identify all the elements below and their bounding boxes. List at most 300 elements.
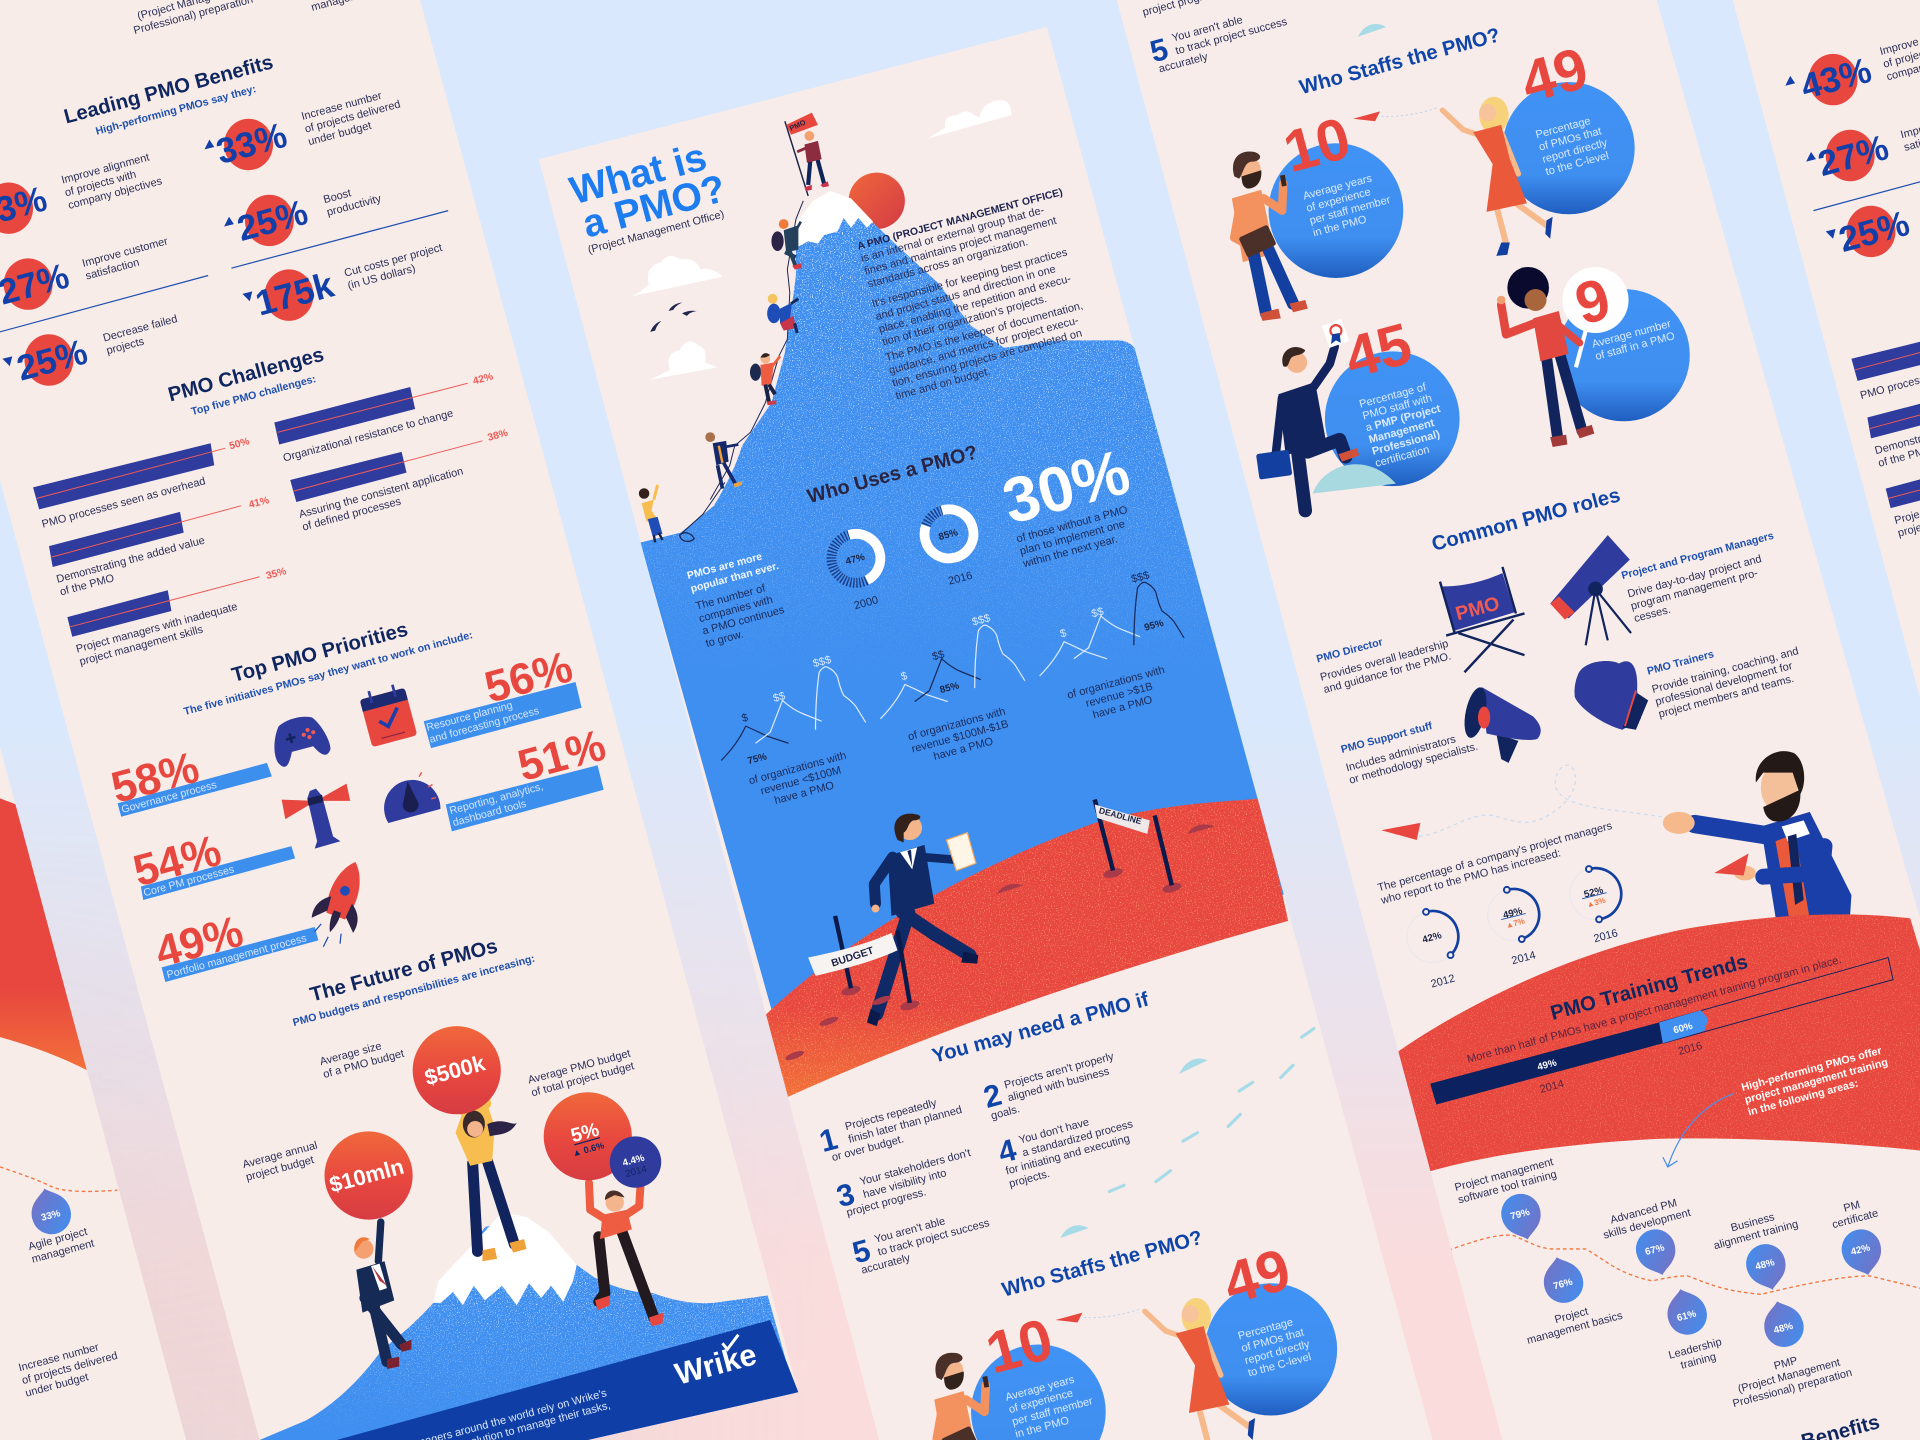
ball: 10mln with man [324,1131,413,1369]
benefit: 175k: 175k [251,265,338,324]
priority: portfolio: Portfolio management process [165,932,308,981]
drop: 61 [1661,1284,1726,1374]
stat: 10 years [1232,106,1403,321]
chart labels: small: $ [740,712,749,725]
priority: resource planning: and forecasting process [428,705,540,746]
item 4: for initiating and executing [1004,1133,1131,1178]
cloud [632,256,722,296]
priority: governance: 58% [106,743,204,813]
drop: 67: Advanced PM [1609,1197,1678,1226]
drop: 79: software tool training [1457,1169,1558,1206]
heading: challenges: PMO Challenges [166,344,326,406]
heading: who staffs: Who Staffs the PMO? [1000,1227,1205,1302]
heading: roles: Common PMO roles [1429,484,1623,556]
drop: 61: training [1679,1351,1717,1372]
dashed route [0,1167,118,1191]
subheading: High-performing PMOs say they: [94,83,257,138]
drop: agile [32,1188,71,1234]
priority: reporting [446,731,606,832]
drop: 42: certificate [1831,1207,1880,1231]
chart labels: mid: $$ [931,648,946,663]
icon: gamepad [274,716,330,767]
heading: who staffs: Who Staffs the PMO? [1297,24,1502,99]
text: PMO trainers: Provide training, coaching, and [1651,645,1800,696]
chart labels: small: revenue <$100M [759,764,843,797]
text: what is a PMO definition: tion of their organization's projects. [881,293,1048,349]
ring: 2014: ▲7% [1505,916,1526,930]
heading: priorities: Top PMO Priorities [229,619,410,687]
benefit: 175k: (in US dollars) [346,263,417,292]
lower staff stats repeat: per staff member [1011,1395,1094,1428]
lower staff stats repeat: report directly [1243,1338,1311,1367]
deadline posts behind hill top [1095,800,1172,885]
chart labels: large: of organizations with [1066,664,1166,702]
text: what is a PMO definition: time and on budget. [894,366,992,402]
bar: consistency 38%: 38% [487,428,509,444]
benefit: 25% boost [224,189,380,246]
benefit: 33%: of projects delivered [304,98,402,136]
panel: left strip [0,0,845,1440]
dome markers [1060,1059,1207,1238]
benefit: 33%: 33% [212,115,291,172]
drop: 48 PMP: PMP [1773,1355,1799,1373]
item 5 repeat [1146,3,1292,75]
divider right [231,211,448,268]
priority: resource planning: Resource planning [425,699,514,734]
text: what is a PMO definition [856,187,1095,402]
ring: 2016: 2016 [1592,927,1619,945]
title: a PMO? [578,167,730,247]
bar: consistency 38% [290,428,509,534]
priority: portfolio [158,917,318,982]
text: project and program managers [1620,530,1775,625]
ring: 2016 [1564,862,1627,945]
item 5: 5 [849,1233,874,1270]
drop: 76: management basics [1526,1310,1624,1347]
text: PMO trainers: PMO Trainers [1646,648,1715,678]
stat: 49 percent: of PMOs that [1538,125,1603,154]
stat: 45 percent: Professional) [1371,428,1442,458]
stat: 45 percent: 45 [1338,311,1418,391]
benefit: 43% [0,150,164,235]
icon: rocket [312,862,360,947]
ball: 5% with climber: 4.4% [621,1153,646,1169]
benefit: 25% boost: 25% [233,192,312,249]
dome marker [1358,24,1386,37]
item 2: Projects aren't properly [1003,1051,1116,1091]
chart labels: large: revenue >$1B [1084,681,1154,710]
deadline posts front [1095,800,1182,894]
stat: 9 staff: 9 [1569,266,1617,338]
bar: skills 35% [67,566,288,668]
benefit: 25% failed [2,313,182,389]
stat: 10 years: in the PMO [1312,213,1368,239]
chart labels: large [1059,569,1173,726]
donut: 2000: 2000 [853,594,880,612]
bar: added value 41%: Demonstrating the added value [55,535,206,586]
drop: 48 business [1709,1206,1800,1295]
text: more popular [686,547,790,650]
item 1: or over budget. [831,1133,905,1164]
item 1: 1 [816,1122,841,1159]
stat: 9 staff [1497,266,1690,447]
drop: 42 [1828,1195,1887,1280]
plane trail [1381,108,1438,116]
lower staff stats repeat: 49 [1217,1237,1297,1317]
arrow [1663,1093,1734,1167]
mountain with snow [260,1212,808,1440]
climber two [771,219,802,269]
item 5: You aren't able [873,1215,947,1246]
item 4: 4 [995,1133,1020,1170]
chart labels: mid: have a PMO [932,735,995,763]
text: average annual: Average annual [241,1140,319,1171]
drop: 76 [1522,1252,1624,1347]
progress bar: 2014 [1538,1078,1565,1096]
text: what is a PMO definition: It's responsible for keeping best practices [871,246,1069,310]
chart labels: small: of organizations with [748,750,848,787]
bar: added value 41% [49,495,270,598]
chart labels: mid: revenue $100M-$1B [910,718,1010,756]
budget finish [808,916,920,1012]
challenge bar [1886,448,1920,540]
benefit: 27%: Improve customer [81,235,170,270]
stat: 30 percent: 30% [995,436,1137,538]
plane trail with loop [1419,765,1662,836]
item 5: accurately [860,1252,912,1277]
priority: governance: Governance process [120,779,218,816]
stat: 45 percent [1256,311,1460,511]
lower staff stats repeat: Percentage [1237,1316,1294,1342]
text: project and program managers: Drive day-to-day project and [1626,553,1763,600]
text: what is a PMO definition: place, enabling the repetition and execu- [878,273,1073,336]
text: more popular: popular than ever. [689,560,780,595]
benefit: 25% failed: projects [105,335,146,357]
drop: 76: Project [1553,1306,1590,1326]
rope [680,201,803,535]
stat: 9 staff: Average number [1591,318,1673,351]
stat: 10 years: per staff member [1308,194,1392,227]
sun [849,173,905,229]
climber four [750,353,780,405]
drop: 42: PM [1842,1199,1861,1215]
text: project and program managers: program management pro- [1630,567,1760,613]
priority: resource planning [424,642,582,748]
stat: 49 percent: to the C-level [1544,150,1610,178]
text: project and program managers: Project and Program Managers [1620,530,1775,582]
item 4: You don't have [1018,1116,1090,1147]
benefit: 27%: satisfaction [84,257,141,282]
drop: 48 PMP: Professional) preparation [1731,1367,1853,1410]
bar: resistance 42%: Organizational resistance to change [282,407,455,465]
climber five [705,432,742,489]
text: average size: of a PMO budget [322,1048,405,1081]
icon: gauge [384,772,440,823]
subheading: future: PMO budgets and responsibilities are increasing: [292,953,536,1029]
chart: small revenue peaks [721,667,866,760]
chart labels: large: have a PMO [1091,694,1154,721]
text: agile project management: Agile project [27,1226,89,1253]
bar: skills 35%: Project managers with inadequate [75,601,239,656]
benefit: 25% failed: Decrease failed [102,313,179,345]
woman with binoculars [639,485,662,542]
priority: portfolio: 49% [150,907,248,977]
ring: 2014 [1482,883,1545,967]
chart labels: small: 75% [746,751,768,767]
bar: skills 35%: 35% [265,566,288,582]
text: more popular: PMOs are more [686,550,764,582]
text: average annual: project budget [245,1154,315,1184]
ball: 500k with woman [413,1026,527,1261]
item 4: a standardized process [1021,1118,1135,1159]
text: reports to PMO: who report to the PMO has increased: [1379,847,1562,907]
stat: 45 percent: certification [1374,444,1431,470]
chart labels: large: $$ [1090,606,1105,620]
bar: overhead 50% [33,436,251,531]
bar: added value 41%: 41% [248,495,270,511]
flag [785,113,818,196]
drop: 79: Project management [1453,1156,1555,1194]
heading: you may need: You may need a PMO if [930,989,1151,1068]
stat: 9 staff: of staff in a PMO [1594,330,1677,363]
text: PMO director: and guidance for the PMO. [1322,650,1452,696]
text: what is a PMO definition: A PMO (PROJECT MANAGEMENT OFFICE) [856,187,1064,253]
light blue footprints [1109,1029,1314,1191]
text: what is a PMO definition: is an internal or external group that de- [860,204,1046,265]
lower staff stats repeat: of PMOs that [1240,1327,1305,1355]
panel: right strip [1102,0,1920,1440]
deadline posts front: DEADLINE [1098,805,1143,826]
benefit: 25% failed: 25% [13,332,92,389]
text: reports to PMO: The percentage of a company's project managers [1376,820,1614,894]
text: increase number: under budget [24,1371,90,1400]
progress bar: 60% [1672,1021,1694,1036]
chart labels: mid: $$$ [971,612,992,629]
benefit: 27% [0,238,167,310]
priority: governance [112,753,272,817]
donut: 2000: 47% [844,552,866,567]
ball: 500k with woman: $500k [422,1050,488,1090]
ball: 5% with climber: ▲ 0.6% [571,1140,605,1158]
stat: 45 percent: Percentage of [1358,381,1428,411]
heading: future: The Future of PMOs [308,935,500,1006]
item 3: 3 [833,1177,858,1214]
budget finish: BUDGET [830,945,876,970]
ring: 2014: 2014 [1510,949,1537,967]
text: high performing: in the following areas: [1747,1078,1860,1119]
icon: calendar [358,682,417,747]
chart labels: small: $$$ [812,654,833,670]
item 4: projects. [1008,1168,1051,1190]
text: PMO trainers: professional development for [1654,660,1794,708]
runner [867,814,978,1026]
text: average size: Average size [318,1040,383,1068]
item 5 repeat: to track project success [1174,16,1289,57]
text: average budget: of total project budget [530,1060,635,1099]
subheading: challenges: Top five PMO challenges: [190,373,317,418]
item 5 repeat: You aren't able [1171,14,1244,45]
ball: 5% with climber: 5% [568,1119,601,1147]
text: increase number: of projects delivered [21,1350,119,1387]
drop: 48 business: Business [1730,1211,1776,1234]
item 3: Your stakeholders don't [858,1147,972,1188]
drop: 48 PMP [1725,1296,1853,1410]
text: project and program managers: cesses. [1633,604,1672,625]
item 3 [833,1147,979,1219]
ring: 2014: 49% [1502,906,1524,921]
bar: consistency 38%: of defined processes [301,495,403,534]
text: PMO director: PMO Director [1315,636,1384,665]
donut: 2016 [919,504,979,588]
drop: 61: 61% [1676,1308,1698,1324]
climber three [767,294,798,333]
benefit: 43%: of projects with [64,169,138,199]
paper plane [1353,111,1380,121]
subheading: priorities: The five initiatives PMOs say they want to work on include: [183,629,474,718]
chart labels: mid: $ [900,670,909,683]
text: more popular: The number of [694,582,768,613]
benefit: 33%: Increase number [300,90,383,123]
chart labels: large: 95% [1143,618,1165,634]
item 1: finish later than planned [847,1104,963,1146]
item 5 repeat: 5 [1146,32,1172,69]
priority: reporting: dashboard tools [451,798,528,829]
item 2: 2 [980,1078,1005,1115]
bar: skills 35%: project management skills [78,624,205,668]
text: PMO trainers: project members and teams. [1657,673,1795,721]
text: what is a PMO definition: standards across an organization. [867,236,1029,290]
lower staff stats repeat: of experience [1007,1387,1074,1416]
benefit: 25% boost: productivity [326,193,383,219]
priority: core PM: Core PM processes [142,863,236,899]
text: what is a PMO definition: guidance, and metrics for project execu- [888,315,1080,377]
chart labels: small [740,654,854,812]
bar: overhead 50%: 50% [228,436,251,452]
panel: center strip [527,0,1457,1440]
lower staff stats repeat [934,1237,1337,1440]
priority: reporting: 51% [513,721,611,791]
item 2: aligned with business [1006,1065,1111,1104]
climber on summit [797,131,829,191]
ball: 5% with climber: 2014 [624,1164,649,1180]
drop: 48 PMP: 48% [1773,1321,1795,1336]
chart labels: mid [900,612,1013,768]
chart labels: small: have a PMO [773,780,836,807]
bar: added value 41%: of the PMO [59,572,116,598]
stat: 49 percent [1442,36,1635,256]
footer: wrike [337,1320,798,1440]
chart labels: mid: of organizations with [907,706,1007,743]
paper plane [1381,823,1420,840]
stat: 49 percent: 49 [1515,36,1595,115]
cloud [650,341,718,380]
stat: 30 percent: within the next year. [1021,533,1119,570]
item 5 [849,1204,995,1277]
text: high performing: project management training [1743,1056,1889,1106]
text: what is a PMO definition: tion, ensuring projects are completed on [891,327,1083,390]
character: man throwing plane [1663,751,1851,932]
priority: resource planning: 56% [480,642,578,713]
red training band [1396,914,1920,1172]
item 3: have visibility into [862,1167,948,1201]
text: average budget: Average PMO budget [527,1048,632,1087]
item 1: Projects repeatedly [844,1097,938,1133]
stat: 10 years: of experience [1305,186,1372,215]
drop: 48 business: 48% [1754,1257,1776,1273]
divider left [0,276,208,332]
cloud [928,100,1011,138]
drop: 61: Leadership [1667,1336,1723,1362]
item 1 [816,1091,967,1164]
icon: telescope [1550,535,1631,645]
progress bar [1430,958,1893,1104]
item 5: to track project success [877,1217,991,1259]
chart labels: large: $ [1059,627,1068,640]
panel: far left strip [0,748,186,1440]
bar: resistance 42%: 42% [472,371,495,387]
donut: 2016: 85% [937,527,960,543]
ball: 5% with climber [544,1092,664,1326]
benefit: 33%: under budget [307,120,373,148]
chart: mid revenue peaks [880,625,1025,719]
drop: 48 business: alignment training [1712,1218,1800,1252]
birds [650,302,697,332]
chart labels: small: $$ [772,690,787,705]
ring: 2012: 42% [1421,930,1443,946]
stat: 49 percent: Percentage [1534,115,1592,141]
text: what is a PMO definition: fines and maintains project management [863,215,1058,278]
bar: consistency 38%: Assuring the consistent application [298,465,465,521]
stat: 45 percent: a PMP (Project [1364,403,1442,434]
benefit: 27%: 27% [1814,127,1893,184]
stat: 30 percent: of those without a PMO [1015,504,1129,545]
chart labels: mid: 85% [939,680,961,696]
icon: lighthouse [282,784,350,849]
benefit: 43% [1785,21,1920,107]
priority: core PM [134,836,296,900]
divider [1813,153,1920,211]
ring: 2016: 52% [1583,885,1605,901]
bar: overhead 50%: PMO processes seen as overhead [41,475,207,531]
red training wave [0,798,89,1071]
drop: 67: skills development [1602,1207,1692,1242]
stat: 45 percent: PMO staff with [1361,392,1433,422]
footer: wrike: Wrike [671,1337,760,1392]
heading: leading benefits: Leading PMO Benefits [62,51,276,129]
chart labels: large: $$$ [1130,569,1151,586]
stat: 10 years: 10 [1277,106,1357,185]
heading: who uses: Who Uses a PMO? [805,442,980,508]
drop: 79 [1453,1156,1558,1245]
text: PMO trainers [1646,645,1807,721]
text: PMO support stuff: PMO Support stuff [1340,720,1434,756]
chart: large revenue peaks [1040,582,1184,676]
priority: reporting: Reporting, analytics, [448,781,545,817]
item 2: goals. [990,1103,1021,1122]
ring: 2012: 2012 [1430,973,1456,991]
priority: core PM: 54% [128,826,226,896]
progress bar: 2016 [1677,1040,1704,1058]
ball: 10mln with man: $10mln [327,1154,407,1198]
heading: training trends: PMO Training Trends [1548,951,1750,1025]
lower staff stats repeat: in the PMO [1014,1415,1071,1440]
drop: 67: 67% [1644,1242,1666,1258]
stat: 30 percent: plan to implement one [1019,518,1126,558]
flag: PMO [788,117,807,133]
stat: 45 percent: Management [1368,417,1436,446]
benefit: 25% boost: Boost [322,187,352,206]
drop value: 33% [40,1208,62,1224]
